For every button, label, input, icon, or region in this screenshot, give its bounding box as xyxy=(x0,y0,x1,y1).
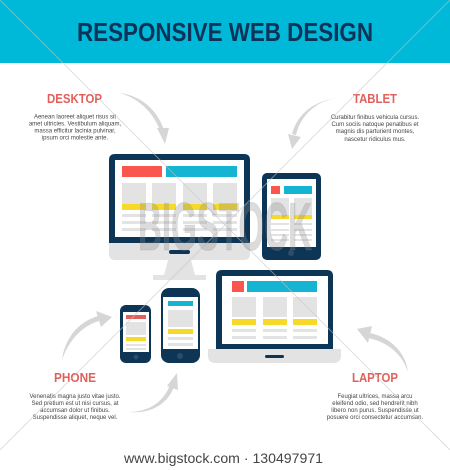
yellow bars xyxy=(122,204,237,210)
text block: desktop xyxy=(29,114,122,142)
desktop monitor xyxy=(109,154,250,280)
small phone xyxy=(120,305,151,363)
text block: phone: Venenatis magna justo vitae justo. xyxy=(29,394,121,400)
text block: tablet: nascetur ridiculus mus. xyxy=(344,137,406,143)
arrow: laptop xyxy=(357,326,408,372)
text block: laptop: libero non purus. Suspendisse ut xyxy=(331,408,419,414)
heading: tablet: TABLET xyxy=(353,91,397,106)
arrow: phone left xyxy=(62,311,112,360)
arrow: desktop xyxy=(120,93,169,144)
laptop device xyxy=(208,270,341,363)
tablet device xyxy=(262,173,321,260)
text block: desktop: ipsum orci molestie ante. xyxy=(42,136,109,142)
text block: tablet: Cum sociis natoque penatibus et xyxy=(331,122,419,128)
chin xyxy=(109,243,250,260)
button xyxy=(169,250,190,254)
text block: laptop: eleifend odio, sed hendrerit nibh xyxy=(332,401,418,407)
text block: desktop: Aenean laoreet aliquet risus sit xyxy=(34,114,116,120)
screen xyxy=(115,160,244,237)
arrow: phone right xyxy=(128,373,178,412)
text block: desktop: massa efficitur lacinia pulvinar, xyxy=(34,128,116,134)
bezel xyxy=(109,154,250,243)
watermark footer: www.bigstock.com · 130497971 xyxy=(123,451,323,466)
heading: laptop: LAPTOP xyxy=(352,370,398,385)
text block: desktop: amet ultricies. Vestibulum aliquam, xyxy=(29,122,122,128)
text block: laptop xyxy=(327,394,424,421)
stand xyxy=(164,260,195,275)
text block: phone xyxy=(29,394,121,421)
gray blocks xyxy=(122,183,237,204)
heading: phone: PHONE xyxy=(54,370,96,385)
text block: laptop: Feugiat ultrices, massa arcu xyxy=(337,394,413,400)
header band xyxy=(0,0,450,63)
text block: tablet: magnis dis parturient montes, xyxy=(336,129,415,135)
text block: tablet xyxy=(331,115,420,143)
text block: tablet: Curabitur finibus vehicula cursus. xyxy=(331,115,420,121)
text block: laptop: posuere orci consectetur accumsan. xyxy=(327,415,424,421)
text block: phone: Suspendisse aliquet, neque vel. xyxy=(33,415,118,421)
text lines xyxy=(122,214,237,231)
text block: phone: Sed pretium est ut nisi cursus, at xyxy=(31,401,119,407)
header blocks xyxy=(122,166,162,177)
large phone xyxy=(161,288,200,363)
title: RESPONSIVE WEB DESIGN xyxy=(77,17,373,47)
text block: phone: accumsan dolor ut finibus. xyxy=(40,408,110,414)
arrow: tablet xyxy=(288,98,337,149)
heading: desktop: DESKTOP xyxy=(47,91,102,106)
